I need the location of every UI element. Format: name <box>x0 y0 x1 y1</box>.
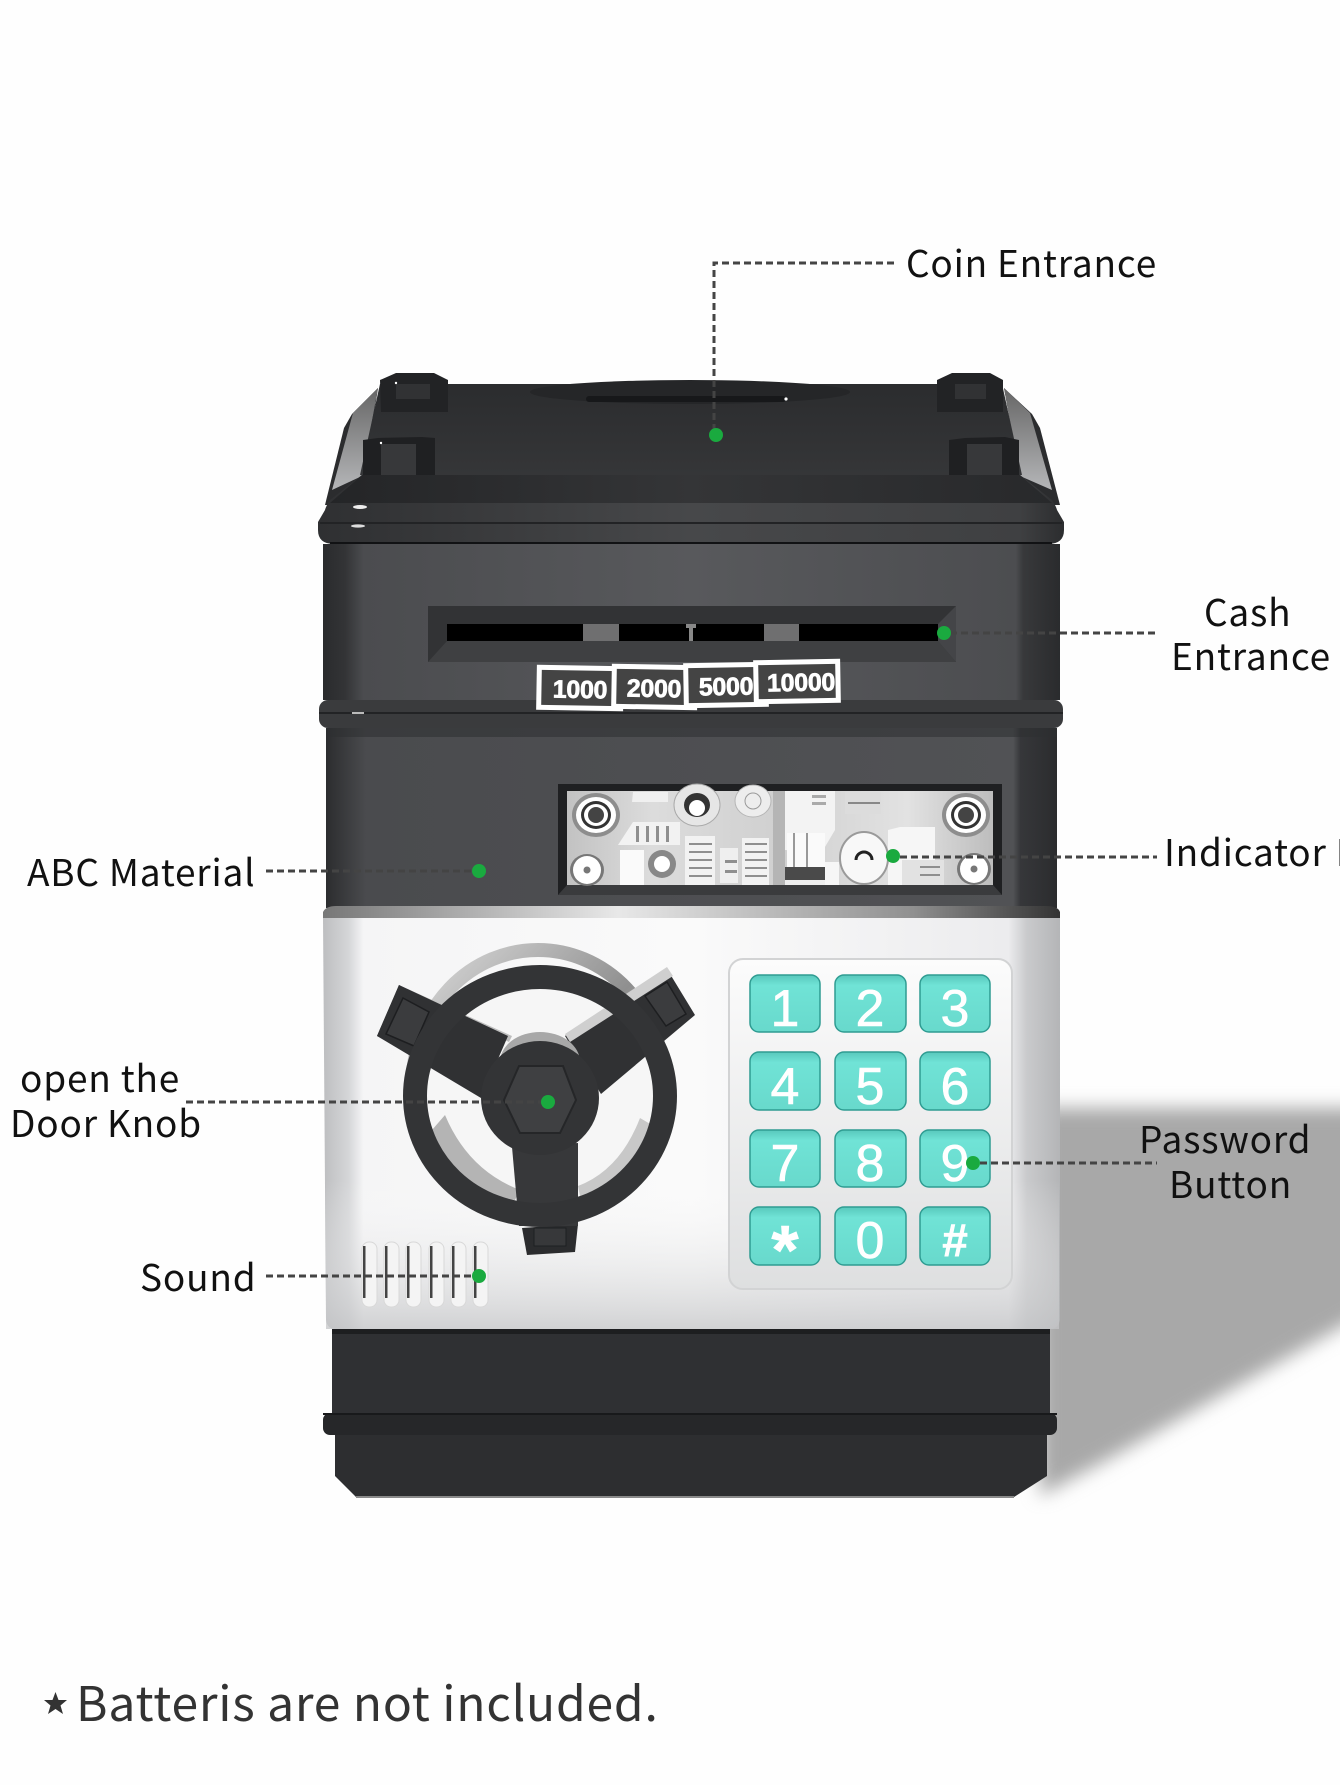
callout: Cash Entrance <box>937 583 1331 681</box>
callout: ABC Material: ABC Material <box>27 843 255 897</box>
key digits: * <box>771 1211 799 1289</box>
silver band <box>323 906 1060 918</box>
base <box>323 1329 1057 1498</box>
mechanism blocks <box>618 791 944 885</box>
upper body <box>323 544 1060 700</box>
callout: Cash Entrance: Entrance <box>1171 627 1331 681</box>
callout: open the Door Knob: Door Knob <box>10 1094 202 1148</box>
middle band <box>319 700 1063 728</box>
battery note: Batteris are not included. <box>76 1665 659 1735</box>
key digits: 8 <box>856 1135 884 1193</box>
callout: Password Button: Button <box>1169 1155 1292 1209</box>
key digits: 9 <box>941 1135 969 1193</box>
cash slot <box>428 606 956 662</box>
callout: Password Button: Password <box>1139 1110 1311 1164</box>
denomination labels: 1000 <box>553 676 607 704</box>
lid top surface <box>325 380 1060 505</box>
keys <box>750 975 990 1265</box>
door knob wheel <box>377 950 695 1255</box>
callout: Cash Entrance: Cash <box>1204 583 1291 637</box>
callout: Password Button <box>966 1110 1311 1209</box>
callout: Coin Entrance <box>709 234 1157 442</box>
coils and discs <box>570 784 991 886</box>
key digits: 1 <box>771 980 799 1038</box>
key digits: # <box>942 1214 968 1266</box>
lower black body <box>326 728 1057 908</box>
denomination labels <box>539 661 838 709</box>
speaker slots <box>362 1242 488 1307</box>
callout: open the Door Knob <box>10 1049 555 1148</box>
key digits: 3 <box>941 980 969 1038</box>
display window <box>558 784 1002 895</box>
lid front <box>318 475 1064 544</box>
callout: ABC Material <box>27 843 486 897</box>
key digits <box>771 980 969 1289</box>
callout: Indicator Light <box>886 823 1340 877</box>
denomination labels: 5000 <box>699 673 753 701</box>
key digits: 2 <box>856 980 884 1038</box>
key digits: 4 <box>771 1058 799 1116</box>
keypad <box>729 959 1012 1289</box>
callout: open the Door Knob: open the <box>20 1049 180 1103</box>
key digits: 0 <box>856 1212 884 1270</box>
silver door panel <box>323 918 1060 1329</box>
mechanism bars <box>636 826 940 877</box>
callout: Sound <box>140 1248 486 1302</box>
key digits: 6 <box>941 1058 969 1116</box>
callout: Sound: Sound <box>140 1248 256 1302</box>
bolts <box>363 373 1019 475</box>
callout: Coin Entrance: Coin Entrance <box>906 234 1157 288</box>
cast shadow <box>1040 1108 1340 1496</box>
denomination labels: 2000 <box>627 675 681 703</box>
safe body <box>318 373 1064 1498</box>
key digits: 7 <box>771 1135 799 1193</box>
denomination labels: 10000 <box>767 668 835 698</box>
key digits: 5 <box>856 1058 884 1116</box>
